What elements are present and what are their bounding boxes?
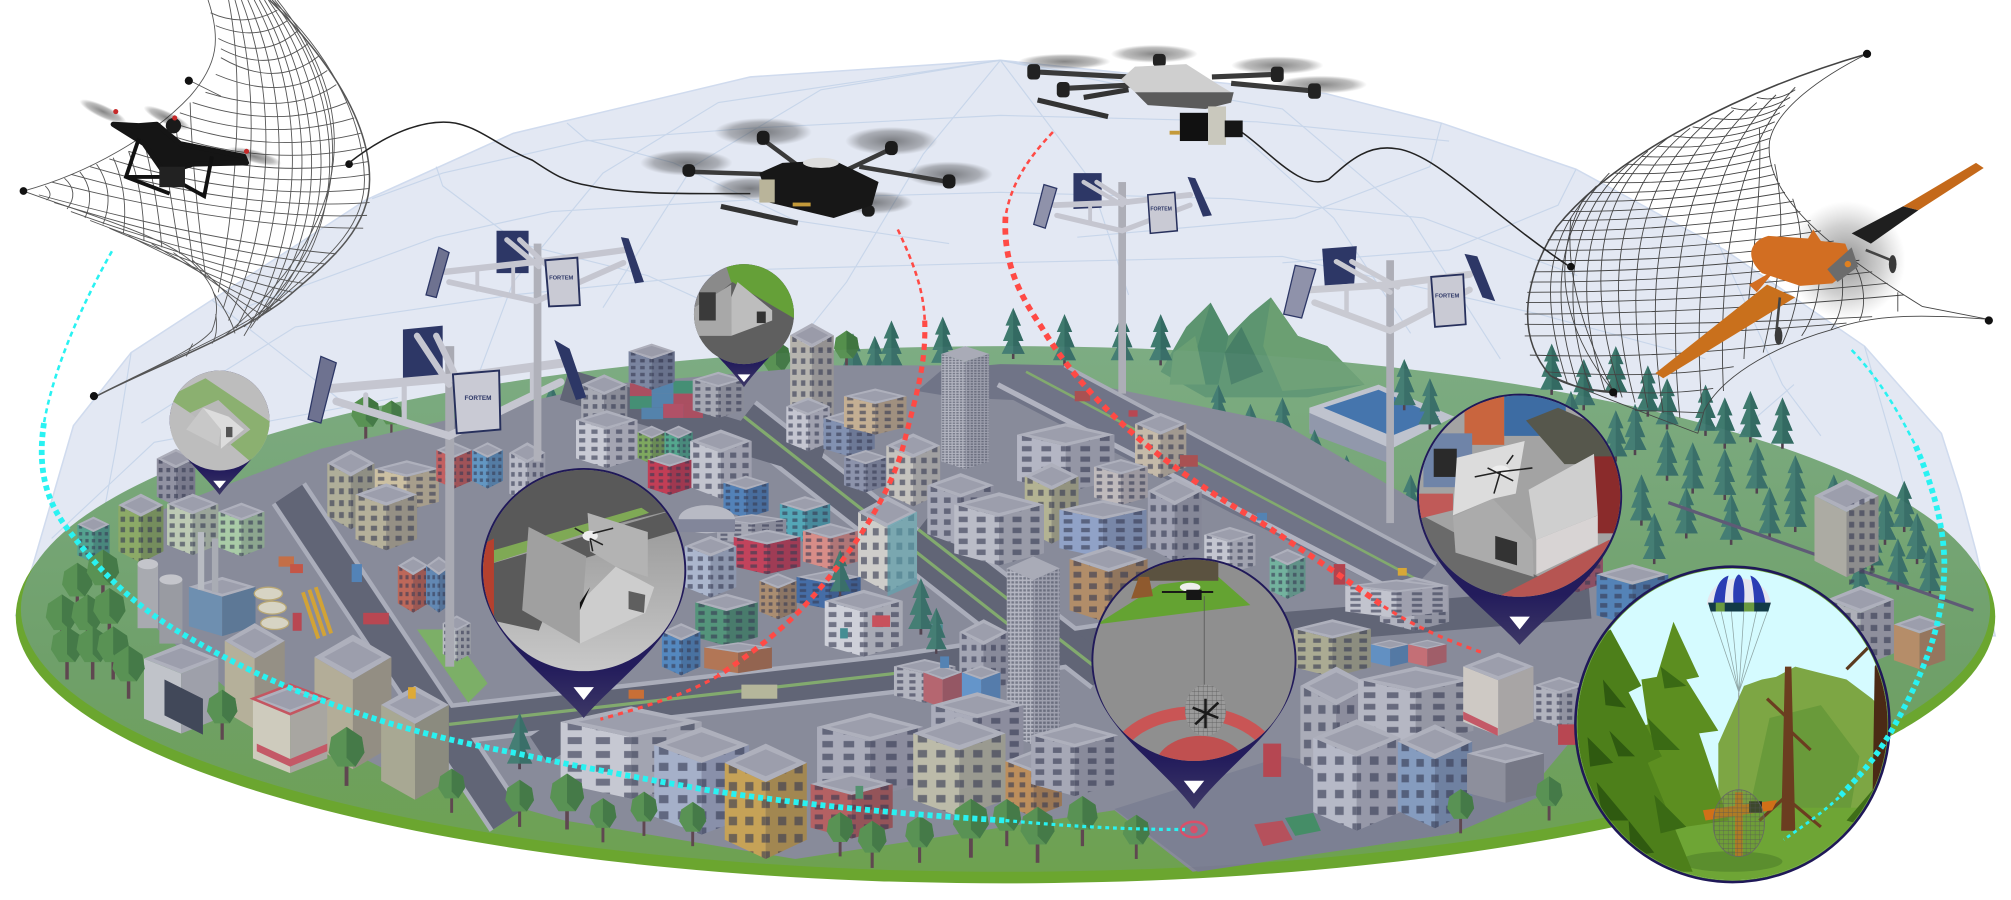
shipping containers: [630, 379, 703, 419]
red dashed flight path 2: [1005, 132, 1482, 653]
map pin: drone lowering netted target: [1091, 558, 1297, 826]
net: right capture net: [1525, 54, 1988, 433]
landing target marker: [1181, 822, 1207, 837]
stadium: [1309, 385, 1454, 464]
sensor tower 2: FORTEM: [464, 395, 492, 402]
right cyan dashed flight path: [1784, 350, 1944, 840]
sensor tower 4: [1284, 246, 1495, 523]
pin scene: [1417, 394, 1623, 599]
city buildings: north district: [576, 323, 1449, 631]
sensor tower 2: [308, 326, 586, 667]
trees along west edge: [46, 549, 364, 786]
map pin: drone at open box building: [1417, 394, 1623, 645]
net anchor weights right: [1567, 50, 1993, 396]
net: left capture net: [23, 0, 370, 396]
roadside park: [417, 629, 488, 703]
sensor tower 4: FORTEM: [1435, 293, 1459, 299]
pin scene: [167, 369, 272, 474]
city buildings: east district: [1294, 479, 1945, 831]
icon: white hexacopter interceptor: [1018, 45, 1367, 145]
red dashed flight path 1: [600, 229, 925, 719]
dome lattice lines: [52, 60, 1923, 564]
pin scene: [693, 262, 798, 367]
city buildings: central district: [662, 496, 1148, 675]
sensor tower 1: [426, 231, 644, 462]
forest mountain: [1718, 667, 1890, 846]
road network: [289, 385, 1590, 821]
oil refinery tanks and factory: [138, 532, 331, 644]
map pin: small house north west: [167, 369, 272, 495]
skyscraper: [1007, 556, 1060, 745]
map pin: small house north: [693, 262, 798, 387]
cars on streets: [293, 391, 1576, 846]
sensor tower 3: FORTEM: [1150, 206, 1172, 212]
pavement plaza: [1114, 756, 1544, 872]
background mountain: [1161, 297, 1364, 397]
ground disc grass: [21, 346, 1990, 872]
elevated highway: [917, 364, 1436, 597]
pine trees: [1641, 622, 1728, 826]
pin scene: [1093, 560, 1295, 761]
dome back wall: [16, 60, 1995, 636]
pin arrow: [213, 481, 226, 488]
icon: black quadcopter caught in net: [77, 95, 283, 196]
tether line from left net to drone: [349, 122, 750, 194]
sensor tower 1: FORTEM: [549, 275, 574, 281]
pin arrow: [738, 374, 750, 382]
icon: orange fixed wing target aircraft: [1656, 163, 1984, 378]
right forest: [351, 308, 1941, 603]
dome front haze: [21, 346, 1990, 872]
city buildings: south west towers: [144, 623, 449, 800]
pin arrow: [573, 687, 594, 700]
railway line: [1668, 503, 1973, 610]
city buildings: south central: [561, 619, 1118, 859]
tether line from right net to drone: [1241, 132, 1570, 267]
icon: black hexacopter interceptor: [640, 118, 993, 223]
net anchor weights left: [20, 77, 353, 400]
caged orange aircraft: [1735, 792, 1743, 856]
trees along south edge: [438, 550, 1563, 868]
pin scene: [481, 468, 686, 673]
circle inset: parachute recovery in forest: [1575, 567, 1890, 885]
map pin: drone entering open house: [481, 468, 686, 718]
city base with streets: [141, 365, 1654, 872]
cyan dashed flight path left: [42, 251, 1185, 829]
parachute: [1711, 609, 1768, 692]
pin arrow: [1184, 781, 1204, 794]
tree trunks: [1781, 667, 1795, 831]
sensor tower 3: [1034, 173, 1212, 394]
pin arrow: [1509, 617, 1530, 629]
city buildings: west district: [77, 442, 545, 662]
ground disc rim: [16, 350, 1995, 883]
